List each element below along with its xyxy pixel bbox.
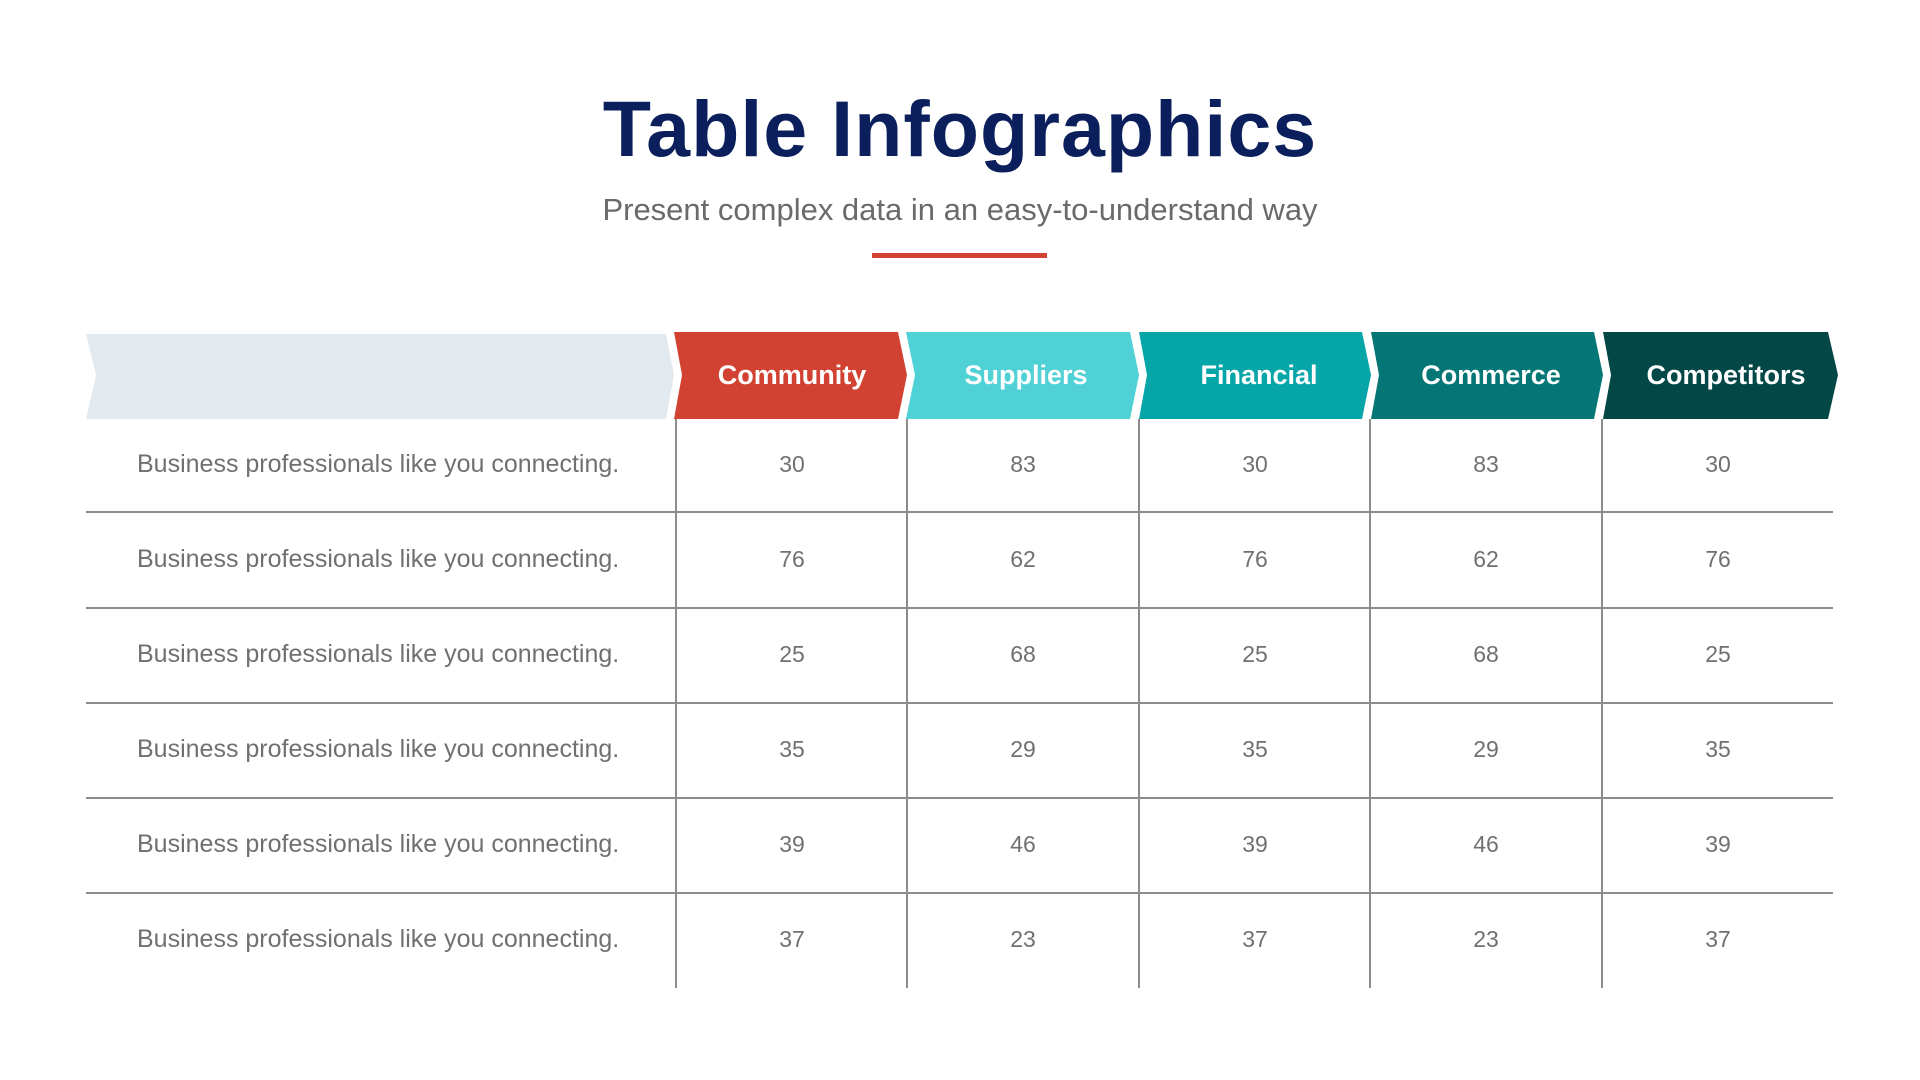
table body text: 68 — [1010, 641, 1036, 667]
table body text: 30 — [1242, 451, 1268, 477]
title: Table Infographics — [603, 84, 1317, 173]
table body text: 37 — [1242, 926, 1268, 952]
table body text: 39 — [1705, 831, 1731, 857]
table body text — [137, 450, 1731, 953]
table body text: Business professionals like you connecting. — [137, 925, 619, 953]
header: Commerce — [1371, 332, 1603, 419]
table body text: Business professionals like you connecting. — [137, 640, 619, 668]
table body text: 76 — [1242, 546, 1268, 572]
header: Financial — [1139, 332, 1371, 419]
red divider — [872, 253, 1047, 258]
table body text: 25 — [779, 641, 805, 667]
table body text: Business professionals like you connecting. — [137, 450, 619, 478]
table body text: 25 — [1705, 641, 1731, 667]
header: Suppliers — [906, 332, 1139, 419]
header: blank banner — [86, 334, 674, 419]
header: Community: Community — [718, 360, 866, 390]
table body text: 25 — [1242, 641, 1268, 667]
table body text: 62 — [1010, 546, 1036, 572]
table body text: 39 — [779, 831, 805, 857]
table body text: Business professionals like you connecting. — [137, 735, 619, 763]
table body text: 23 — [1473, 926, 1499, 952]
table body text: 23 — [1010, 926, 1036, 952]
header: Suppliers: Suppliers — [964, 360, 1088, 390]
table body text: 39 — [1242, 831, 1268, 857]
subtitle: Present complex data in an easy-to-understand way — [602, 192, 1318, 227]
table body text: 83 — [1010, 451, 1036, 477]
table body text: 35 — [779, 736, 805, 762]
table body text: 46 — [1010, 831, 1036, 857]
table body text: 37 — [1705, 926, 1731, 952]
table body text: 37 — [779, 926, 805, 952]
table body text: 35 — [1705, 736, 1731, 762]
table body text: 62 — [1473, 546, 1499, 572]
table body text: 76 — [779, 546, 805, 572]
table body text: 46 — [1473, 831, 1499, 857]
header: Commerce: Commerce — [1421, 360, 1561, 390]
header: Community — [674, 332, 907, 419]
table body text: Business professionals like you connecting. — [137, 545, 619, 573]
table body text: 30 — [779, 451, 805, 477]
table body text: 29 — [1010, 736, 1036, 762]
table body text: 68 — [1473, 641, 1499, 667]
header: Competitors — [1603, 332, 1838, 419]
table body text: 29 — [1473, 736, 1499, 762]
table body text: 83 — [1473, 451, 1499, 477]
table body text: 76 — [1705, 546, 1731, 572]
header: Financial: Financial — [1200, 360, 1318, 390]
header: Competitors: Competitors — [1646, 360, 1806, 390]
table body text: 30 — [1705, 451, 1731, 477]
table body text: Business professionals like you connecting. — [137, 830, 619, 858]
table body text: 35 — [1242, 736, 1268, 762]
